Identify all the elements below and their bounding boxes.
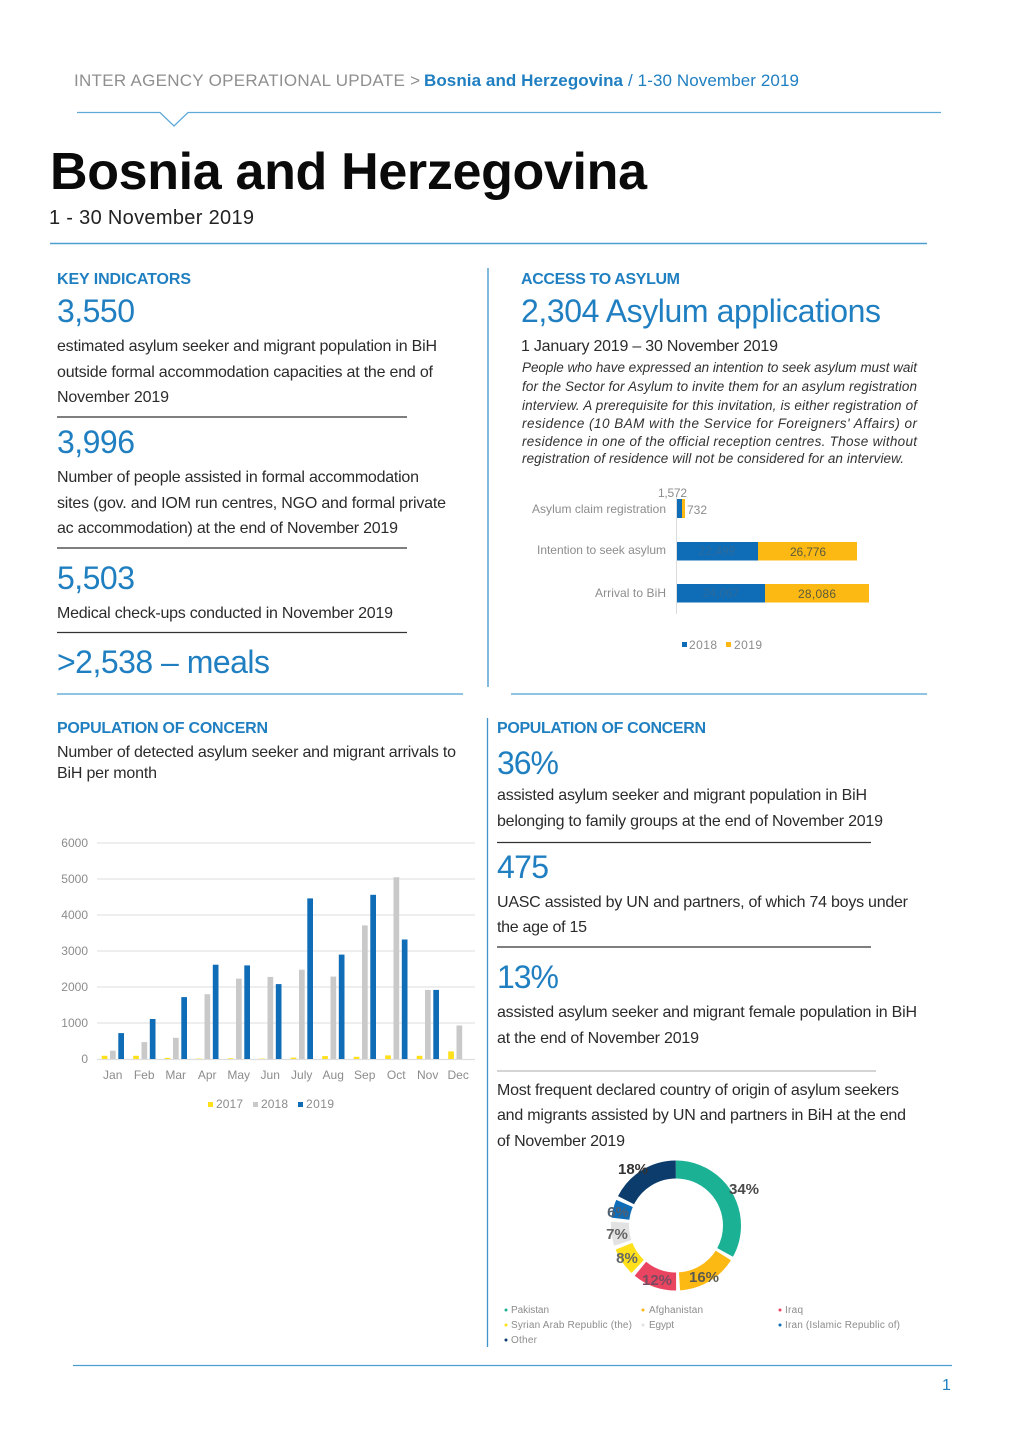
stat: 13% female: 13%	[497, 959, 559, 995]
arrivals heading: POPULATION OF CONCERN	[57, 720, 268, 737]
indicator: 5,503 medical check-ups	[57, 560, 393, 622]
header breadcrumb: / 1-30 November 2019	[628, 71, 799, 90]
page number: 1	[942, 1377, 951, 1394]
2019 bars	[118, 895, 439, 1059]
row: intention to seek asylum: 26,776	[790, 545, 826, 559]
row: asylum claim registration	[532, 486, 707, 518]
row: asylum claim registration: 1,572	[658, 486, 687, 500]
population heading: POPULATION OF CONCERN	[497, 720, 706, 737]
panel: population of concern	[497, 720, 917, 1346]
donut legend: Egypt	[649, 1320, 674, 1331]
asylum explanatory note: People who have expressed an intention to seek asylum must wait	[522, 360, 918, 375]
indicator: 3,550 estimated population: outside formal accommodation capacities at the end of	[57, 364, 434, 381]
indicator: 3,996 people assisted: ac accommodation) at the end of November 2019	[57, 520, 398, 537]
month labels: Aug	[323, 1068, 344, 1082]
y axis labels: 5000	[61, 872, 88, 886]
donut legend: Pakistan	[511, 1305, 549, 1316]
2018 bars	[110, 877, 462, 1059]
y axis labels: 1000	[61, 1016, 88, 1030]
indicator: 3,996 people assisted: 3,996	[57, 424, 135, 460]
donut value labels: 6%	[607, 1204, 629, 1221]
arrivals description	[57, 744, 456, 782]
country of origin description: of November 2019	[497, 1133, 625, 1150]
indicator: 3,996 people assisted: sites (gov. and IOM run centres, NGO and formal private	[57, 495, 446, 512]
donut value labels: 8%	[616, 1250, 638, 1267]
stat: 36% family groups: 36%	[497, 745, 559, 781]
month labels: July	[291, 1068, 312, 1082]
legend: asylum chart	[682, 638, 762, 652]
stat: 475 UASC: 475	[497, 849, 549, 885]
donut legend: Afghanistan	[649, 1305, 703, 1316]
key indicators heading: KEY INDICATORS	[57, 271, 191, 288]
row: asylum claim registration: 732	[687, 503, 707, 517]
header breadcrumb	[74, 71, 799, 90]
month labels: May	[227, 1068, 250, 1082]
legend: asylum chart: 2018	[689, 638, 717, 652]
donut legend	[504, 1305, 900, 1346]
country of origin description	[497, 1082, 906, 1150]
y axis labels: 3000	[61, 944, 88, 958]
header breadcrumb: INTER AGENCY OPERATIONAL UPDATE >	[74, 71, 420, 90]
stat: 13% female: assisted asylum seeker and migrant female population in BiH	[497, 1004, 917, 1021]
month labels: Feb	[134, 1068, 155, 1082]
y axis labels: 6000	[61, 836, 88, 850]
donut value labels: 7%	[606, 1226, 628, 1243]
month labels: Sep	[354, 1068, 376, 1082]
donut value labels: 34%	[729, 1181, 759, 1198]
stat: 475 UASC: UASC assisted by UN and partners, of which 74 boys under	[497, 894, 909, 911]
row: intention to seek asylum: 22,499	[699, 544, 736, 558]
month labels: Mar	[165, 1068, 186, 1082]
indicator: 3,996 people assisted	[57, 424, 446, 537]
asylum applications figure: 2,304 Asylum applications	[521, 293, 881, 329]
donut value labels: 18%	[618, 1161, 648, 1178]
row: arrival to BiH: Arrival to BiH	[595, 586, 666, 600]
row: arrival to BiH: 28,086	[798, 587, 836, 601]
stacked bar chart: asylum process	[532, 486, 869, 652]
asylum explanatory note: for the Sector for Asylum to invite them for an asylum registration	[522, 379, 917, 394]
donut legend: Syrian Arab Republic (the)	[511, 1320, 632, 1331]
header rule with chevron	[77, 112, 941, 126]
row: arrival to BiH	[595, 584, 869, 602]
indicator: 3,550 estimated population: estimated asylum seeker and migrant population in BiH	[57, 338, 437, 355]
indicator: meals: >2,538 – meals	[57, 644, 270, 680]
asylum explanatory note: interview. A prerequisite for this invitation, is either registration of	[522, 398, 918, 413]
2017 bars	[102, 1051, 454, 1059]
panel: arrivals per month	[57, 720, 475, 1111]
y axis labels: 2000	[61, 980, 88, 994]
header breadcrumb: Bosnia and Herzegovina	[424, 71, 624, 90]
asylum explanatory note: residence (10 BAM with the Service for Foreigners' Affairs) or	[522, 416, 918, 431]
month labels: Dec	[448, 1068, 469, 1082]
indicator: 3,550 estimated population: November 2019	[57, 389, 169, 406]
panel: key indicators	[57, 271, 446, 680]
legend: monthly arrivals	[208, 1097, 334, 1111]
country of origin description: Most frequent declared country of origin of asylum seekers	[497, 1082, 899, 1099]
month labels: Oct	[387, 1068, 406, 1082]
indicator: 5,503 medical check-ups: Medical check-ups conducted in November 2019	[57, 605, 393, 622]
asylum explanatory note: registration of residence will not be considered for an interview.	[522, 451, 904, 466]
donut legend: Iran (Islamic Republic of)	[785, 1320, 900, 1331]
donut legend: Iraq	[785, 1305, 803, 1316]
y axis labels: 0	[81, 1052, 88, 1066]
stat: 36% family groups: assisted asylum seeker and migrant population in BiH	[497, 787, 867, 804]
legend: monthly arrivals: 2018	[261, 1097, 288, 1111]
donut value labels: 12%	[642, 1272, 672, 1289]
indicator: 3,550 estimated population: 3,550	[57, 293, 135, 329]
month labels: Jun	[261, 1068, 280, 1082]
month labels: Nov	[417, 1068, 438, 1082]
stat: 475 UASC: the age of 15	[497, 919, 587, 936]
column chart: monthly arrivals	[61, 836, 475, 1111]
title: Bosnia and Herzegovina	[50, 143, 648, 201]
asylum explanatory note	[522, 360, 918, 466]
y axis labels: 4000	[61, 908, 88, 922]
panel: access to asylum	[521, 271, 918, 652]
donut legend: Other	[511, 1335, 538, 1346]
month labels	[103, 1068, 469, 1082]
stat: 475 UASC	[497, 849, 909, 936]
row: intention to seek asylum: Intention to seek asylum	[537, 543, 666, 557]
row: asylum claim registration: Asylum claim registration	[532, 502, 666, 516]
legend: monthly arrivals: 2019	[306, 1097, 334, 1111]
asylum explanatory note: residence in one of the official reception centres. Those without	[522, 434, 918, 449]
legend: monthly arrivals: 2017	[216, 1097, 243, 1111]
row: intention to seek asylum	[537, 542, 857, 560]
date range: 1 January 2019 – 30 November 2019	[521, 338, 778, 355]
month labels: Apr	[198, 1068, 217, 1082]
indicator: 3,550 estimated population	[57, 293, 437, 406]
donut value labels	[606, 1161, 759, 1289]
row: arrival to BiH: 24,067	[703, 586, 740, 600]
stat: 36% family groups: belonging to family groups at the end of November 2019	[497, 813, 883, 830]
donut value labels: 16%	[689, 1269, 719, 1286]
stat: 13% female: at the end of November 2019	[497, 1030, 699, 1047]
access to asylum heading: ACCESS TO ASYLUM	[521, 271, 680, 288]
month labels: Jan	[103, 1068, 122, 1082]
arrivals description: Number of detected asylum seeker and migrant arrivals to	[57, 744, 456, 761]
subtitle date: 1 - 30 November 2019	[49, 207, 254, 229]
stat: 36% family groups	[497, 745, 883, 830]
y axis labels	[61, 836, 88, 1066]
indicator: 5,503 medical check-ups: 5,503	[57, 560, 135, 596]
donut chart: country of origin	[504, 1161, 900, 1346]
indicator: 3,996 people assisted: Number of people assisted in formal accommodation	[57, 469, 419, 486]
legend: asylum chart: 2019	[734, 638, 762, 652]
arrivals description: BiH per month	[57, 765, 157, 782]
country of origin description: and migrants assisted by UN and partners in BiH at the end	[497, 1107, 906, 1124]
stat: 13% female	[497, 959, 917, 1047]
